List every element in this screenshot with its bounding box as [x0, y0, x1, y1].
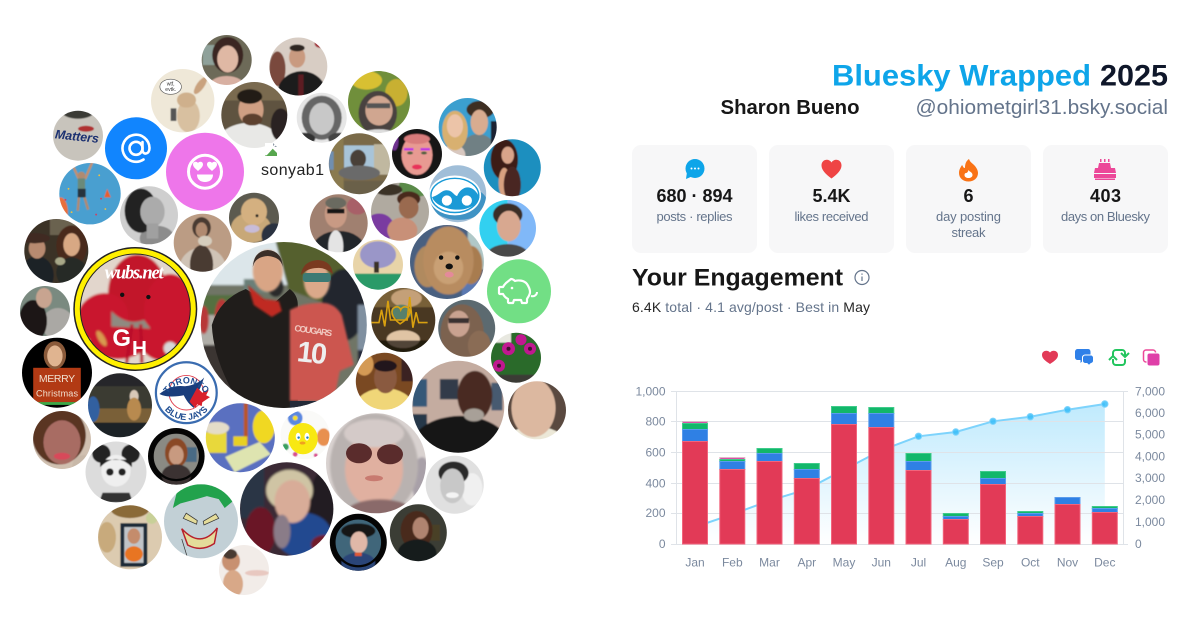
left axis labels: 200 — [645, 506, 666, 520]
stat card: day posting streak: 6 — [963, 186, 974, 206]
avatar: Matters sweatshirt — [53, 110, 103, 161]
month labels: Sep — [982, 556, 1004, 570]
left axis labels — [635, 384, 666, 551]
avatar: black and white classic actor — [420, 450, 490, 520]
stat card: likes received — [769, 145, 894, 253]
legend icons — [1042, 349, 1160, 366]
icon: reposts — [1109, 350, 1129, 365]
month labels: Jan — [685, 556, 705, 570]
right axis labels: 7,000 — [1135, 384, 1165, 398]
avatar: Joker cartoon — [157, 477, 245, 566]
avatar: man in sunglasses — [310, 194, 368, 252]
avatar: woman among yellow flowers — [348, 71, 410, 133]
cumulative line — [695, 404, 1105, 527]
icon: speech bubble — [686, 159, 704, 179]
month labels: Dec — [1094, 556, 1115, 570]
icon: likes — [1042, 351, 1058, 364]
month labels: Mar — [759, 556, 780, 570]
icon: cake — [1094, 159, 1116, 180]
avatar: rabbit with radio: wtf, — [167, 81, 175, 87]
avatar: Matters sweatshirt: Matters — [54, 127, 100, 146]
display name: Sharon Bueno — [720, 97, 860, 119]
avatar: baby — [214, 540, 274, 600]
avatar: main profile photo couple — [200, 242, 367, 408]
icon: quotes — [1144, 350, 1160, 366]
avatar: purple petunias — [491, 332, 541, 383]
avatar: painted purple tree — [353, 240, 403, 290]
right axis labels: 1,000 — [1135, 515, 1165, 529]
avatar: woman in dark room — [384, 498, 452, 567]
avatar: Merry Christmas bitmoji: MERRY — [39, 373, 75, 385]
line points — [915, 401, 1108, 439]
stat card: likes received: 5.4K — [812, 186, 850, 206]
left axis labels: 0 — [659, 537, 666, 551]
avatar: pink emoji icon — [166, 133, 244, 211]
avatar: couple with older man in hat — [24, 219, 88, 283]
month labels — [685, 556, 1115, 570]
avatar: climbing wall — [59, 163, 121, 224]
avatar: woman with silver hair and sunglasses — [316, 403, 436, 527]
avatar: surprised man on cyan — [479, 200, 536, 257]
avatar: black man with grey beard — [412, 360, 504, 453]
stat card: posts and replies: 680 · 894 — [656, 186, 732, 206]
title: Bluesky Wrapped 2025: 2025 — [1100, 60, 1168, 92]
right axis labels: 4,000 — [1135, 450, 1165, 464]
stat card: days on Bluesky: 403 — [1090, 186, 1121, 206]
avatar: smiling man in yellow shirt — [356, 352, 413, 410]
avatar: Mary Poppins — [324, 508, 392, 576]
left axis labels: 1,000 — [635, 384, 666, 398]
right axis labels: 2,000 — [1135, 493, 1165, 507]
avatar: woman with long dark hair — [20, 286, 70, 336]
avatar: wubs.net red plush with yellow ring — [73, 247, 198, 371]
avatar: Tweety with flowers — [282, 411, 330, 458]
avatar: framed photo with orange shirt — [92, 499, 168, 576]
avatar: broken image with alt text — [261, 143, 324, 179]
right axis labels: 6,000 — [1135, 406, 1165, 420]
right axis labels: 3,000 — [1135, 471, 1165, 485]
avatar: Merry Christmas bitmoji — [22, 338, 92, 408]
engagement summary: 6.4K total · 4.1 avg/post · Best in May — [632, 299, 870, 315]
month labels: Jun — [872, 556, 891, 570]
chart: monthly stacked engagement bars with cumulative line — [635, 384, 1165, 570]
avatar: wubs.net red plush with yellow ring: G — [112, 325, 131, 352]
avatar: blue wave logo — [429, 165, 486, 222]
stat card: day posting streak: streak — [952, 225, 986, 240]
stat card: day posting streak: day posting — [936, 209, 1001, 224]
title: Bluesky Wrapped 2025: Bluesky Wrapped — [832, 60, 1091, 92]
avatar: rabbit with radio — [151, 69, 214, 132]
left axis labels: 600 — [645, 446, 666, 460]
cumulative area — [695, 404, 1105, 544]
stacked bars — [682, 406, 1117, 544]
avatar: couple on blue — [438, 98, 497, 156]
avatar: fluffy dog — [229, 192, 279, 243]
avatar: woman with glasses and long hair — [438, 300, 496, 357]
avatar: man in black jacket — [269, 38, 328, 96]
avatar: blonde woman in blue — [231, 453, 343, 565]
left axis labels: 800 — [645, 414, 666, 428]
avatar cluster — [20, 35, 566, 595]
grid — [671, 391, 1128, 544]
right axis labels: 5,000 — [1135, 428, 1165, 442]
avatar: black and white woman — [296, 92, 347, 143]
avatar: rabbit with radio: evtk. — [165, 87, 176, 93]
stat card: days on Bluesky — [1043, 145, 1168, 253]
avatar: woman with pink makeup — [392, 129, 442, 179]
avatar: woman in purple by river — [371, 182, 429, 241]
month labels: Apr — [797, 556, 816, 570]
avatar: Toronto Blue Jays logo: BLUE JAYS — [165, 406, 208, 420]
avatar: green piggy bank icon — [487, 259, 551, 323]
avatar: main profile photo couple: COUGARS — [294, 323, 333, 338]
avatar: broken image with alt text: sonyab1 — [261, 162, 324, 179]
avatar: main profile photo couple: 10 — [295, 336, 329, 371]
avatar: woman on teal — [484, 139, 541, 196]
month labels: Nov — [1057, 556, 1078, 570]
month labels: Feb — [722, 556, 743, 570]
month labels: Jul — [911, 556, 926, 570]
avatar: sugar skull illustration — [86, 442, 146, 502]
avatar: cat in window hammock — [328, 133, 390, 194]
avatar: woman holding small dog — [174, 214, 232, 272]
icon: info — [855, 270, 869, 284]
avatar: fair man close-up — [508, 381, 566, 440]
icon: flame — [959, 159, 978, 182]
avatar: Toronto Blue Jays logo — [154, 361, 218, 424]
avatar: woman with black ring — [148, 428, 205, 485]
avatar: wubs.net red plush with yellow ring: wubs.net — [105, 262, 164, 283]
stat card: days on Bluesky: days on Bluesky — [1061, 209, 1150, 224]
avatar: dark room scene — [88, 373, 152, 438]
heading: Your Engagement: Your Engagement — [632, 264, 843, 292]
stat card: posts and replies — [632, 145, 757, 253]
avatar: black and white young man — [120, 186, 178, 244]
month labels: Oct — [1021, 556, 1040, 570]
avatar: woman with red tones — [33, 411, 91, 469]
avatar: woman with brown hair — [202, 35, 252, 85]
handle: @ohiometgirl31.bsky.social — [916, 97, 1168, 119]
avatar: Toronto Blue Jays logo: TORONTO — [162, 377, 208, 392]
avatar: woman and heartbeat heart graphic — [371, 288, 436, 352]
left axis labels: 400 — [645, 476, 666, 490]
stat card: posts and replies: posts · replies — [656, 209, 733, 224]
month labels: May — [833, 556, 855, 570]
icon: replies — [1075, 349, 1094, 366]
avatar: poodle — [410, 225, 484, 299]
avatar: Simpsons cartoon — [206, 403, 275, 472]
month labels: Aug — [945, 556, 966, 570]
stat card: likes received: likes received — [794, 209, 868, 224]
avatar: blue mention icon — [105, 117, 167, 179]
icon: heart — [822, 160, 842, 178]
right axis labels — [1135, 384, 1165, 551]
avatar: Merry Christmas bitmoji: Christmas — [36, 389, 78, 399]
right axis labels: 0 — [1135, 537, 1142, 551]
avatar: bearded man in white shirt — [221, 82, 288, 148]
stat card: day posting streak — [906, 145, 1031, 253]
avatar: wubs.net red plush with yellow ring: H — [132, 337, 147, 360]
